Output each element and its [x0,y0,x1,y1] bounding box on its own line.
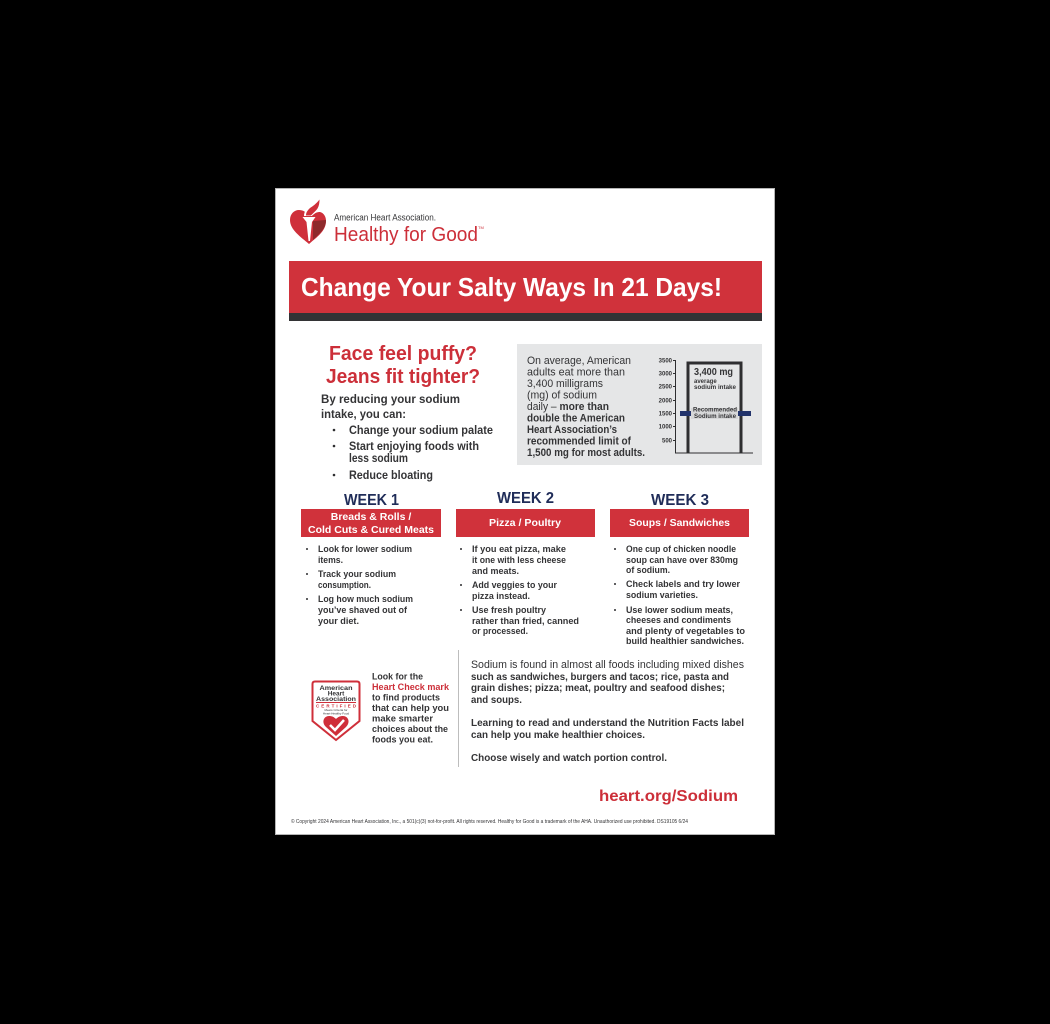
panel text: Heart Association’s [527,424,617,436]
week 1 tips: Log how much sodium [318,594,413,605]
bar chart: sodium intake: 1000 [659,424,673,430]
panel text: daily – more than [527,401,609,413]
logo text: Healthy for Good: Healthy for Good [334,224,478,246]
bar chart: sodium intake: Recommended [693,408,737,414]
text block: benefits of reducing sodium: Reduce bloating [349,468,433,482]
text block: benefits of reducing sodium: By reducing your sodium [321,392,460,406]
week 2 tips: and meats. [472,566,519,577]
text block: sodium sources and advice: can help you make healthier choices. [471,729,645,741]
week 1 tips [306,544,413,627]
text block: sodium sources and advice: grain dishes; pizza; meat, poultry and seafood dishes; [471,682,725,694]
heading: Face feel puffy [326,343,480,388]
week 3 tips: soup can have over 830mg [626,555,738,566]
week 3 tips: cheeses and condiments [626,615,731,626]
week 2 tips: Use fresh poultry [472,605,547,616]
bar chart: sodium intake: 2000 [659,398,673,404]
bar chart: sodium intake: sodium intake [694,385,737,391]
week 2 tips [460,544,579,637]
icon: Heart Check certification badge: Heart [328,690,345,698]
text block: benefits of reducing sodium [321,392,493,482]
text block: Heart Check mark: that can help you [372,703,449,714]
panel: average sodium intake [517,344,762,465]
heading: Face feel puffy: Face feel puffy? [329,343,477,365]
text block: Heart Check mark: Heart Check mark [372,682,450,693]
week 3 tips: sodium varieties. [626,590,698,601]
week 2 tips: Add veggies to your [472,580,557,591]
text block: sodium sources and advice [471,659,744,764]
week 1 tips: consumption. [318,580,371,591]
week 3 tips: and plenty of vegetables to [626,626,745,637]
week 2 tips: it one with less cheese [472,555,566,566]
icon: Heart Check certification badge: Association [316,696,356,703]
text block: sodium sources and advice: Choose wisely and watch portion control. [471,752,667,764]
icon: Heart Check certification badge: American [320,685,353,692]
text block: benefits of reducing sodium: intake, you can: [321,407,406,421]
week 1 tips: items. [318,555,343,566]
week 1 tips: your diet. [318,616,359,627]
logo trademark: TM [478,225,484,230]
week 2 tips: or processed. [472,626,528,637]
text block: benefits of reducing sodium: Change your sodium palate [349,423,493,437]
bar chart: sodium intake: 3000 [659,372,673,378]
panel text: adults eat more than [527,366,625,378]
panel text: double the American [527,412,625,424]
week 3 tips: build healthier sandwiches. [626,636,744,647]
week 1 banner: Breads & Rolls / [331,511,411,523]
bar chart: sodium intake [659,358,753,454]
week 3 tips [614,544,745,647]
text block: benefits of reducing sodium: Start enjoying foods with [349,439,479,453]
panel text: (mg) of sodium [527,390,597,402]
panel: week 2 [456,490,595,637]
panel: week 1 [301,492,441,627]
icon: Heart Check certification badge: Meets Criteria for [324,708,348,712]
page sheet [276,188,774,834]
bar chart: sodium intake: Sodium intake [694,414,737,420]
text block: Heart Check mark: choices about the [372,724,448,735]
week 2 banner: Pizza / Poultry [489,517,561,529]
icon: Heart Check certification badge: CERTIFIED [316,704,357,708]
text block: Heart Check mark [372,672,450,746]
week 1 banner [301,509,441,537]
week 2 tips: If you eat pizza, make [472,544,566,555]
week 3 banner: Soups / Sandwiches [629,517,730,529]
panel: week 3 [610,492,749,647]
panel text: recommended limit of [527,436,631,448]
panel text: 3,400 milligrams [527,378,603,390]
text block: sodium sources and advice: and soups. [471,694,522,706]
title banner [289,261,762,321]
week 2 tips: rather than fried, canned [472,616,579,627]
icon: heart and torch [290,198,326,244]
text block: Heart Check mark: make smarter [372,714,433,724]
week 1 banner: Cold Cuts & Cured Meats [308,524,434,536]
week 3 heading: WEEK 3 [651,492,709,509]
panel text [527,355,645,459]
week 1 tips: Look for lower sodium [318,544,412,555]
text block: benefits of reducing sodium: less sodium [349,451,408,465]
logo text: association name: American Heart Association. [334,212,436,222]
week 3 banner [610,509,749,537]
bar chart: sodium intake: 3500 [659,358,673,364]
text block: sodium sources and advice: Learning to read and understand the Nutrition Facts label [471,717,744,729]
copyright: © Copyright 2024 American Heart Association, Inc., a 501(c)(3) not-for-profit. All rights reserved. Healthy for Good is a trademark of the AHA. Unauthorized use prohibited. DS19105 6/24 [291,818,688,825]
icon: Heart Check certification badge [312,682,360,740]
text block: Heart Check mark: foods you eat. [372,734,433,746]
week 1 tips: Track your sodium [318,569,396,580]
bar chart: sodium intake: 2500 [659,384,673,390]
title: Change Your Salty Ways In 21 Days! [301,272,722,302]
week 1 heading: WEEK 1 [344,492,399,509]
heading: Face feel puffy: Jeans fit tighter? [326,366,480,388]
panel text: 1,500 mg for most adults. [527,447,645,459]
bar chart: sodium intake: average [694,379,717,385]
bar chart: sodium intake: 500 [662,438,673,444]
panel text: On average, American [527,355,631,367]
week 2 tips: pizza instead. [472,591,530,602]
week 2 heading: WEEK 2 [497,490,554,507]
bar chart: sodium intake: 1500 [659,412,673,418]
text block: Heart Check mark: Look for the [372,672,423,682]
week 3 tips: Use lower sodium meats, [626,605,733,616]
text block: sodium sources and advice: such as sandwiches, burgers and tacos; rice, pasta and [471,671,729,683]
logo: American Heart Association Healthy for Good [290,198,484,246]
text block: sodium sources and advice: Sodium is found in almost all foods including mixed dishes [471,659,744,671]
bar chart: sodium intake: 3,400 mg [694,367,733,378]
week 3 tips: One cup of chicken noodle [626,544,736,555]
week 2 banner [456,509,595,537]
week 3 tips: Check labels and try lower [626,579,740,590]
web address: heart.org/Sodium [599,788,738,805]
week 1 tips: you’ve shaved out of [318,605,408,616]
week 3 tips: of sodium. [626,565,670,576]
text block: Heart Check mark: to find products [372,692,440,704]
icon: Heart Check certification badge: Heart-Healthy Food [323,712,349,716]
